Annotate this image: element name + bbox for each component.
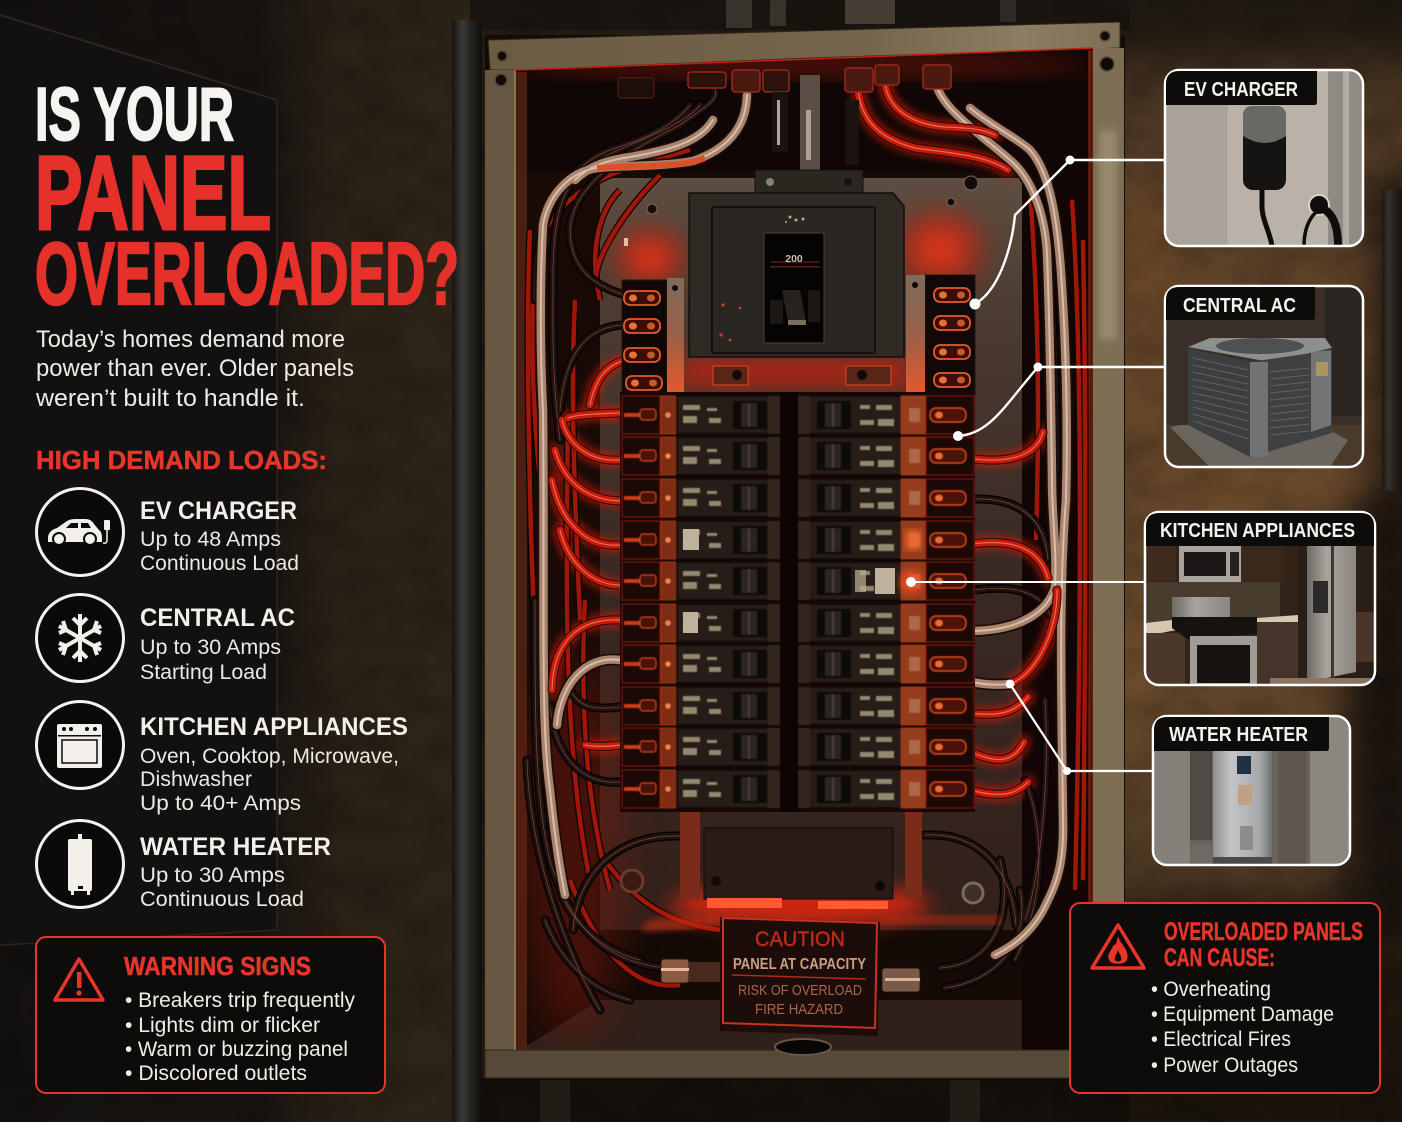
text: Up to 48 Amps (140, 527, 281, 551)
text: Up to 30 Amps (140, 863, 285, 887)
load item: kitchen appliances (36, 702, 408, 815)
conduit fittings (618, 65, 951, 98)
heading: high demand loads: HIGH DEMAND LOADS: (36, 445, 327, 475)
panel: overloaded panels can cause (1070, 903, 1380, 1093)
left breaker column (622, 396, 780, 808)
bottom hole (775, 1039, 831, 1055)
title: OVERLOADED? (35, 224, 459, 323)
photo card: kitchen appliances (1145, 512, 1375, 685)
electrical panel enclosure (485, 22, 1125, 1080)
load item: central AC (36, 594, 295, 684)
heading: CAN CAUSE: (1164, 944, 1275, 972)
title: PANEL (35, 135, 271, 252)
photo card: water heater (1153, 716, 1350, 865)
text: EV CHARGER (140, 497, 297, 525)
list: • Electrical Fires (1151, 1028, 1291, 1051)
list: • Breakers trip frequently (125, 989, 355, 1012)
label tab (1166, 71, 1317, 105)
right breaker column (798, 396, 974, 808)
title (35, 72, 459, 323)
caution sign (720, 917, 880, 1036)
upper left lug block (622, 278, 684, 395)
wire glow (552, 83, 1057, 794)
photo card: central AC: CENTRAL AC (1183, 295, 1296, 317)
conduit connectors (661, 959, 920, 992)
leader line: EV charger (970, 156, 1165, 310)
intro text: weren’t built to handle it. (35, 385, 305, 412)
frame top bar (488, 22, 1120, 70)
heading: WARNING SIGNS (124, 951, 311, 981)
text: Up to 30 Amps (140, 635, 281, 659)
list (1151, 978, 1334, 1077)
text: Up to 40+ Amps (140, 791, 301, 815)
photo card: kitchen appliances: KITCHEN APPLIANCES (1160, 520, 1355, 542)
upper right lug block (906, 275, 975, 395)
text: WATER HEATER (140, 833, 331, 861)
label tab (1166, 287, 1315, 320)
text: CENTRAL AC (140, 604, 295, 632)
text (140, 713, 408, 815)
text: KITCHEN APPLIANCES (140, 713, 408, 741)
photo card: EV charger: EV CHARGER (1184, 79, 1298, 101)
label bar (1146, 513, 1374, 546)
photo card: central AC (1165, 286, 1363, 467)
photo card: EV charger (1165, 70, 1363, 246)
frame left side (485, 70, 515, 1078)
leader line: central AC (953, 362, 1165, 441)
frame bottom bar (485, 1050, 1124, 1078)
photo card: water heater: WATER HEATER (1169, 724, 1308, 746)
text: Dishwasher (140, 767, 252, 791)
list: • Power Outages (1151, 1054, 1298, 1077)
list: • Discolored outlets (125, 1062, 307, 1085)
caution sign: FIRE HAZARD (755, 1002, 843, 1018)
leader line: water heater (1006, 680, 1153, 775)
list (125, 989, 355, 1085)
icon: fire triangle (1092, 925, 1144, 968)
icon: warning triangle (55, 959, 103, 1000)
text (140, 497, 299, 575)
text (140, 833, 331, 911)
main breaker (689, 193, 904, 357)
plate screws (647, 176, 978, 214)
icon: oven (36, 702, 124, 788)
title: IS YOUR (35, 72, 234, 156)
red glow on plate (604, 198, 996, 927)
frame right side (1093, 48, 1124, 1078)
list: • Lights dim or flicker (125, 1014, 320, 1037)
list: • Warm or buzzing panel (125, 1038, 348, 1061)
text: Starting Load (140, 660, 267, 684)
load item: water heater (36, 820, 331, 911)
text: Continuous Load (140, 887, 304, 911)
text: Continuous Load (140, 551, 299, 575)
amperage label: 200 (785, 253, 803, 265)
label tab (1154, 717, 1329, 751)
panel back plate (600, 178, 1022, 930)
icon: electric car (36, 488, 124, 576)
icon: water heater tank (36, 820, 124, 908)
intro text (35, 326, 354, 412)
text: Oven, Cooktop, Microwave, (140, 744, 399, 768)
caution sign: CAUTION (755, 928, 845, 951)
top junction block (755, 170, 863, 193)
heading (1164, 918, 1363, 972)
pipes behind the panel (452, 0, 1402, 1122)
icon: snowflake (36, 594, 124, 682)
list: • Equipment Damage (1151, 1003, 1334, 1026)
load item: EV charger (36, 488, 299, 576)
intro text: power than ever. Older panels (36, 355, 354, 382)
panel: warning signs (36, 937, 385, 1093)
intro text: Today’s homes demand more (36, 326, 345, 353)
lower plate (621, 812, 1000, 932)
caution sign: PANEL AT CAPACITY (733, 956, 867, 973)
text (140, 604, 295, 684)
caution sign: RISK OF OVERLOAD (738, 983, 862, 999)
leader line: kitchen appliances (899, 570, 1145, 594)
list: • Overheating (1151, 978, 1271, 1001)
